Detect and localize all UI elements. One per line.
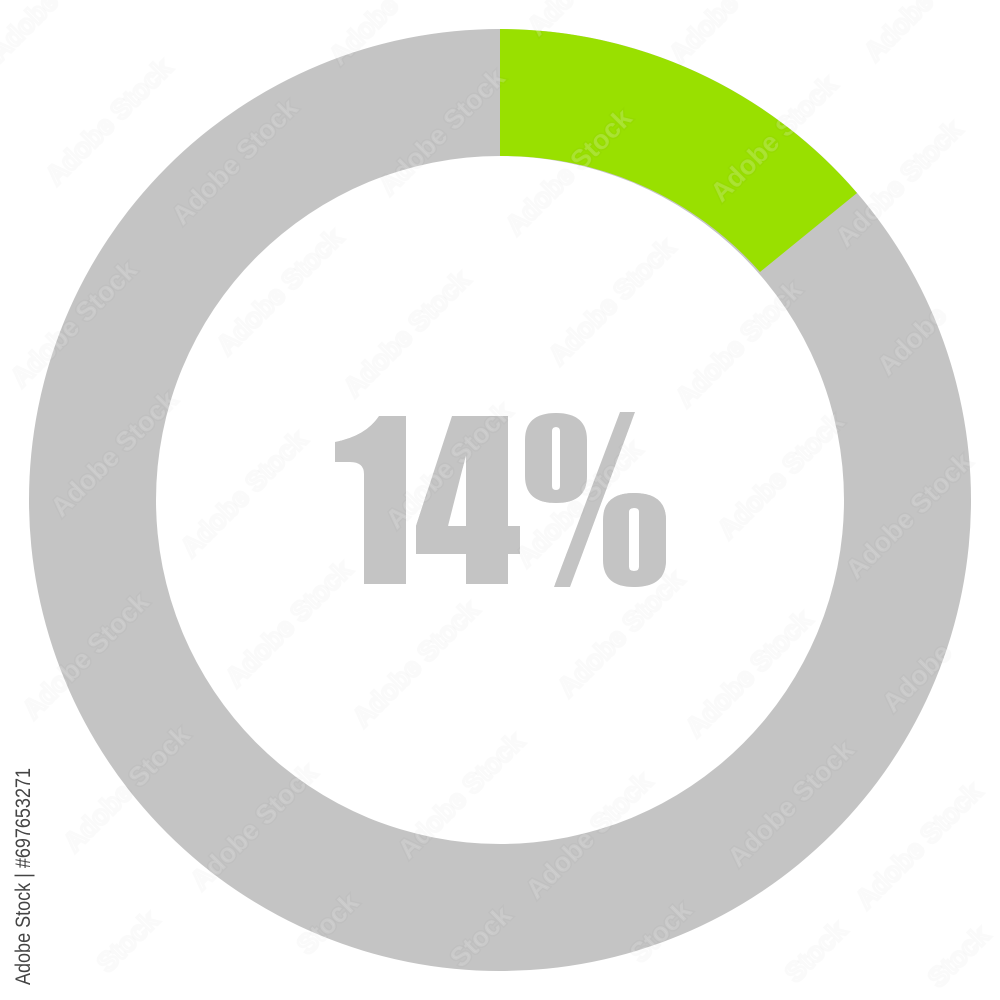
center percentage label: %	[522, 370, 677, 634]
watermark pattern: Adobe Stock	[392, 726, 530, 865]
watermark pattern: Adobe Stock	[380, 396, 518, 535]
watermark pattern: Adobe Stock	[850, 776, 988, 915]
watermark pattern: Adobe Stock	[211, 222, 349, 361]
watermark pattern: Adobe Stock	[17, 586, 155, 725]
watermark pattern: Adobe Stock	[705, 69, 843, 208]
watermark pattern: Adobe Stock	[830, 114, 968, 253]
watermark pattern: Stock	[624, 894, 698, 968]
watermark pattern: Stock	[779, 914, 853, 988]
watermark pattern: Adobe Stock	[347, 594, 485, 733]
center percentage label: 4	[405, 369, 518, 632]
watermark pattern: Adobe Stock	[166, 92, 304, 231]
watermark pattern: Adobe Stock	[680, 604, 818, 743]
watermark pattern: Adobe Stock	[58, 719, 196, 858]
watermark pattern: Adobe Stock	[45, 384, 183, 523]
watermark pattern: Adobe Stock	[670, 274, 808, 413]
watermark pattern: Adobe Stock	[220, 554, 358, 693]
center percentage label	[335, 412, 666, 587]
watermark pattern: Stock	[444, 899, 518, 973]
watermark pattern: Adobe	[876, 637, 957, 718]
watermark pattern: Stock	[922, 919, 996, 993]
center percentage label: 1	[318, 369, 436, 632]
watermark pattern: Adobe Stock	[552, 564, 690, 703]
watermark pattern: Adobe Stock	[5, 254, 143, 393]
watermark pattern: Adobe Stock	[840, 446, 978, 585]
watermark pattern: Adobe Stock	[722, 734, 860, 873]
watermark pattern: Adobe Stock	[500, 102, 638, 241]
donut value segment: 14% green	[500, 29, 857, 272]
watermark pattern: Adobe Stock	[373, 62, 511, 201]
watermark pattern: Adobe Stock	[712, 406, 850, 545]
watermark pattern: Adobe Stock	[510, 434, 648, 573]
watermark pattern: Adobe Stock	[40, 52, 178, 191]
watermark pattern: Adobe	[871, 300, 952, 381]
watermark pattern: Stock	[91, 904, 165, 978]
watermark pattern: Adobe Stock	[175, 424, 313, 563]
watermark pattern: Stock	[291, 886, 365, 960]
watermark pattern: Adobe Stock	[338, 264, 476, 403]
stock id side label: Adobe Stock | #697653271	[12, 768, 35, 985]
watermark pattern: Adobe Stock	[185, 757, 323, 896]
watermark pattern: Adobe Stock	[520, 766, 658, 905]
watermark pattern: Adobe Stock	[543, 232, 681, 371]
